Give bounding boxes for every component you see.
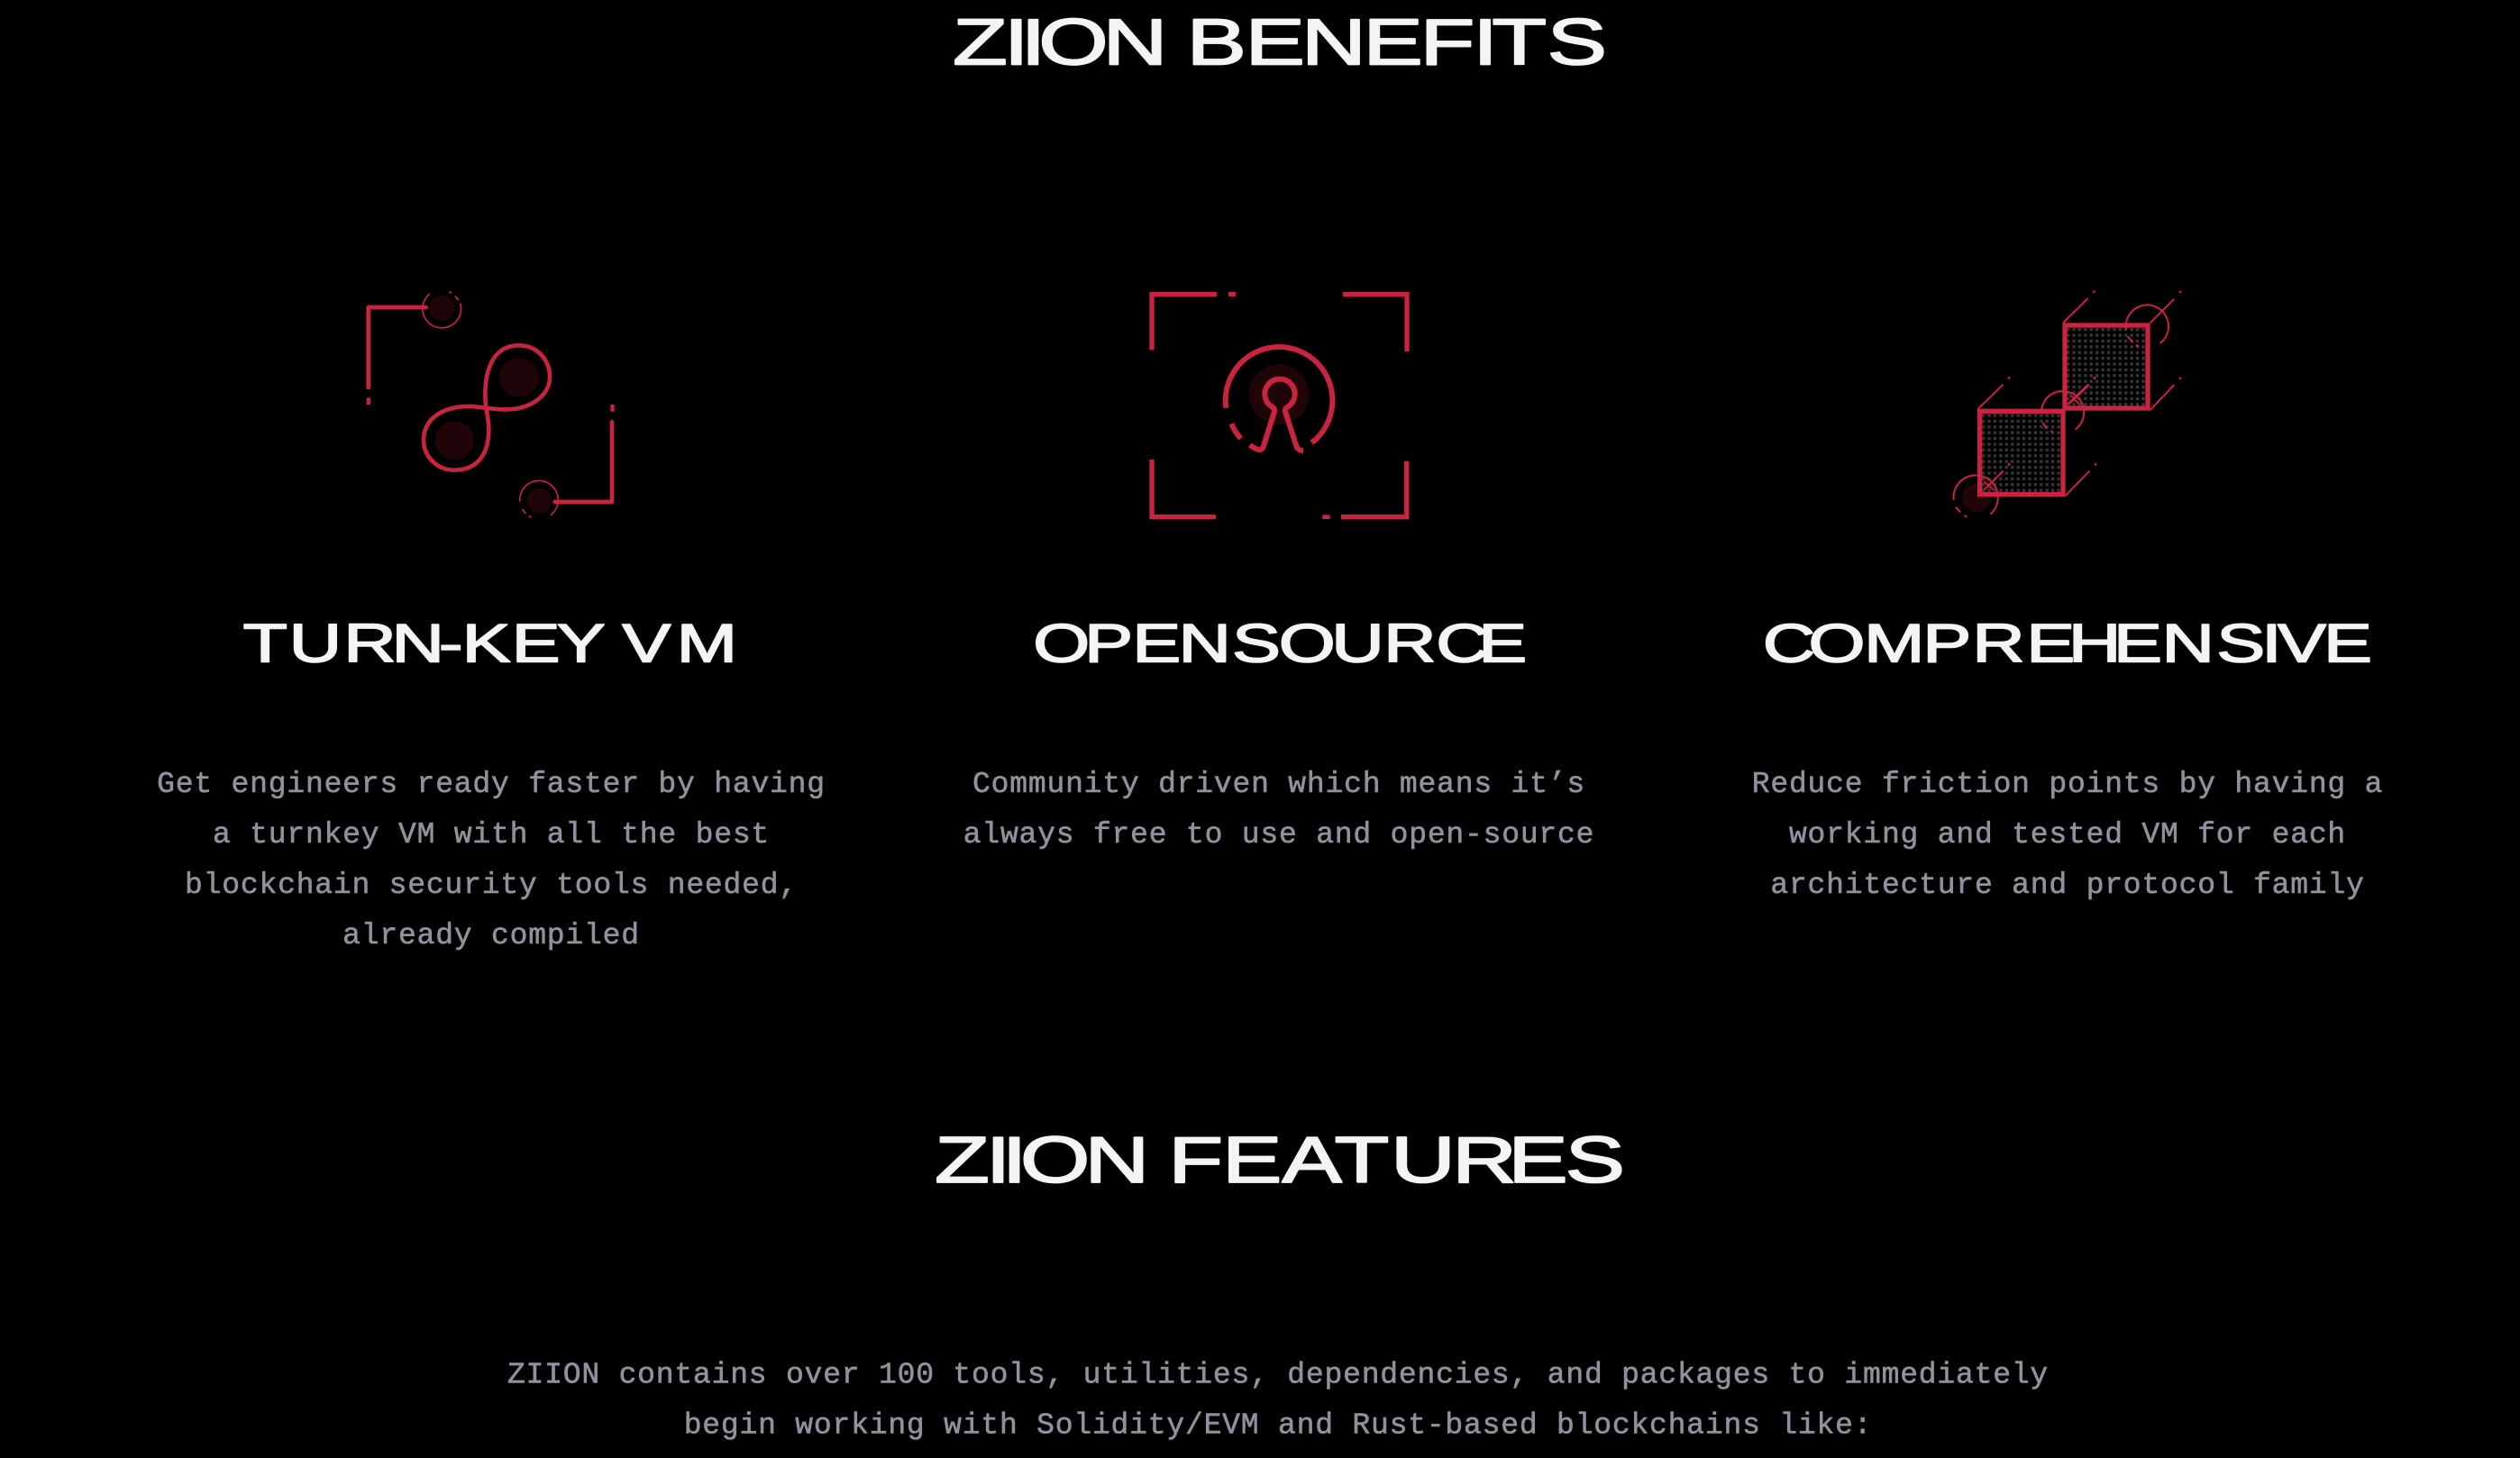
heading: comprehensive: COMPREHENSIVE (1763, 614, 2372, 674)
text: comprehensive description: architecture and protocol family (1770, 869, 2365, 902)
title: ziion benefits: ZIION BENEFITS (953, 6, 1607, 78)
text: turn-key vm description (157, 768, 826, 952)
text: comprehensive description (1752, 768, 2383, 902)
title: ziion features: ZIION FEATURES (935, 1124, 1625, 1197)
icon: infinity loop (367, 292, 615, 517)
text: features introduction: begin working with Solidity/EVM and Rust-based blockchains like: (684, 1409, 1872, 1442)
text: comprehensive description: working and tested VM for each (1789, 818, 2346, 852)
text: opensource description: Community driven which means it’s (972, 768, 1585, 801)
panel: opensource (963, 292, 1594, 852)
text: turn-key vm description: blockchain security tools needed, (185, 869, 798, 902)
text: opensource description (963, 768, 1594, 852)
panel: turn-key vm (157, 292, 826, 952)
icon: open source keyhole (1152, 292, 1407, 519)
icon: linked cubes (1953, 290, 2181, 517)
text: opensource description: always free to use and open-source (963, 818, 1594, 852)
text: features introduction (507, 1359, 2049, 1442)
text: turn-key vm description: a turnkey VM with all the best (213, 818, 770, 852)
heading: turn-key vm: TURN-KEY VM (242, 614, 737, 674)
heading: opensource: OPENSOURCE (1033, 614, 1527, 674)
text: turn-key vm description: already compiled (342, 919, 640, 952)
panel: comprehensive (1752, 290, 2383, 902)
text: comprehensive description: Reduce friction points by having a (1752, 768, 2383, 801)
text: turn-key vm description: Get engineers ready faster by having (157, 768, 826, 801)
text: features introduction: ZIION contains over 100 tools, utilities, dependencies, and packages to immediately (507, 1359, 2049, 1391)
